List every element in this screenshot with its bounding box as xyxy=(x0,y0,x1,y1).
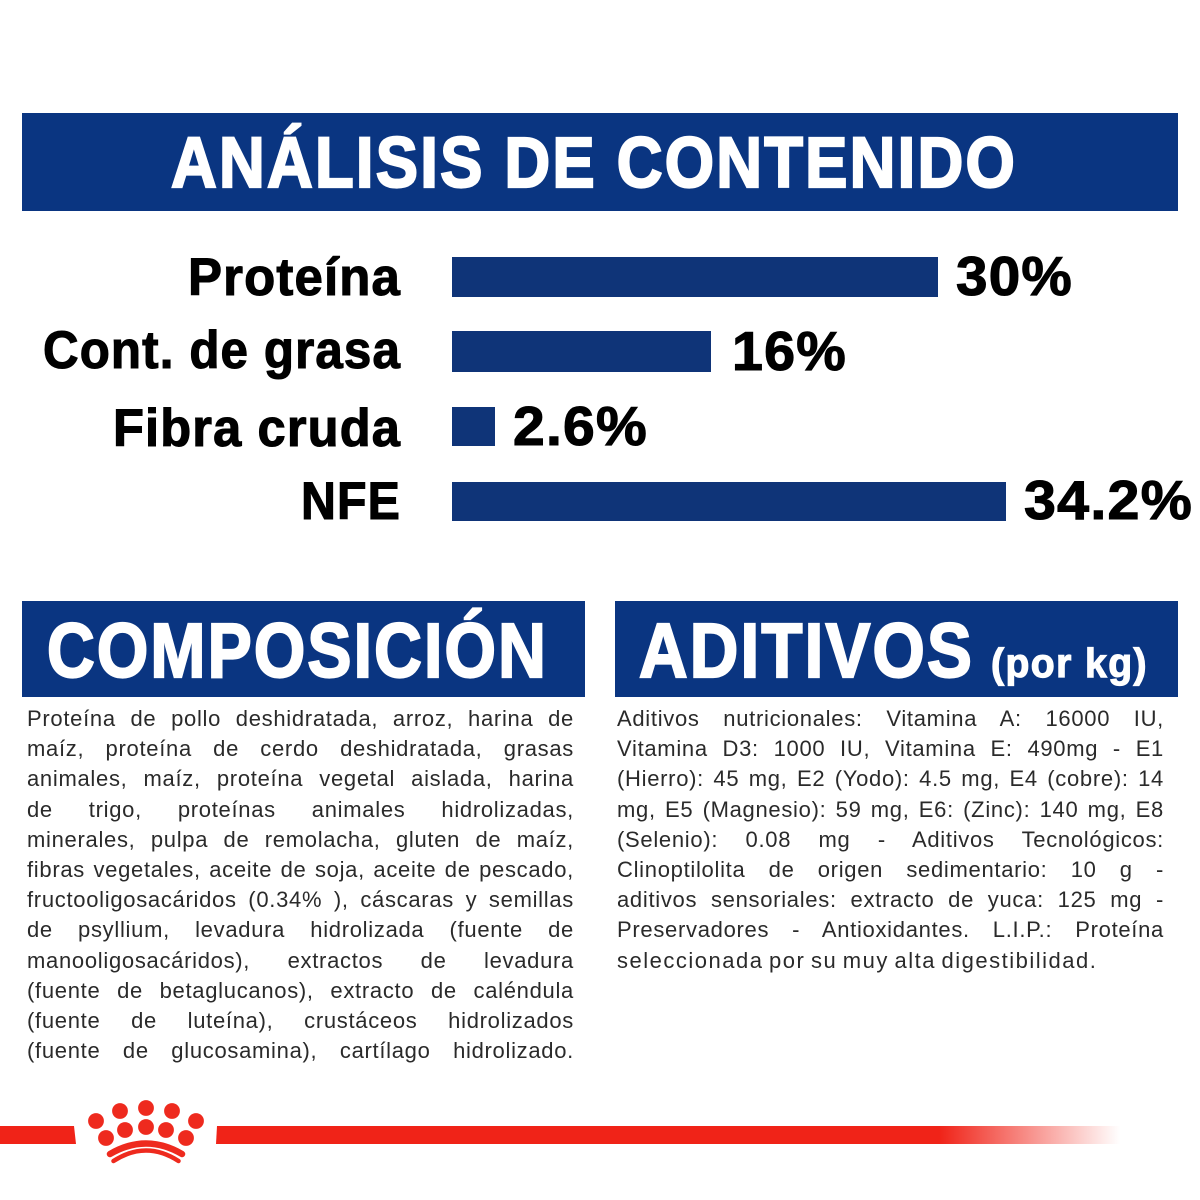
additives text block: aditivos sensoriales: extracto de yuca: 125 mg - xyxy=(617,887,1164,912)
row: Proteína xyxy=(188,245,1073,307)
additives text block: mg, E5 (Magnesio): 59 mg, E6: (Zinc): 140 mg, E8 xyxy=(617,797,1164,822)
row: Fibra cruda: 2.6% xyxy=(513,395,648,457)
red footer line right xyxy=(216,1126,1120,1144)
composition heading: COMPOSICIÓN xyxy=(47,608,548,694)
row: Cont. de grasa xyxy=(43,320,847,382)
composition text block: maíz, proteína de cerdo deshidratada, grasas xyxy=(27,736,574,761)
red footer line left xyxy=(0,1126,76,1144)
row: Proteína: Proteína xyxy=(188,248,401,307)
row: Cont. de grasa: Cont. de grasa xyxy=(43,321,401,380)
additives banner xyxy=(615,601,1178,697)
additives text block: (Hierro): 45 mg, E2 (Yodo): 4.5 mg, E4 (cobre): 14 xyxy=(617,766,1164,791)
row: NFE xyxy=(301,469,1193,531)
additives text block: Aditivos nutricionales: Vitamina A: 16000 IU, xyxy=(617,706,1164,731)
row: Fibra cruda: Fibra cruda xyxy=(113,399,401,458)
bar chart: nutrient analysis xyxy=(43,245,1193,531)
row: NFE: NFE xyxy=(301,472,401,531)
title: ANÁLISIS DE CONTENIDO xyxy=(171,124,1017,203)
row: Cont. de grasa: 16% xyxy=(732,320,847,382)
additives text block: Clinoptilolita de origen sedimentario: 10 g - xyxy=(617,857,1164,882)
composition banner xyxy=(22,601,585,697)
composition text block: manooligosacáridos), extractos de levadura xyxy=(27,948,574,972)
additives text block: (Selenio): 0.08 mg - Aditivos Tecnológicos: xyxy=(617,827,1164,852)
additives unit: (por kg) xyxy=(991,640,1148,686)
row: Proteína: 30% xyxy=(956,245,1073,307)
composition text block: fibras vegetales, aceite de soja, aceite de pescado, xyxy=(27,857,574,882)
composition text block: Proteína de pollo deshidratada, arroz, harina de xyxy=(27,706,574,731)
composition text block: (fuente de luteína), crustáceos hidrolizados xyxy=(27,1008,574,1033)
composition text block xyxy=(27,706,574,1063)
composition text block: minerales, pulpa de remolacha, gluten de maíz, xyxy=(27,827,574,852)
composition text block: (fuente de glucosamina), cartílago hidrolizado. xyxy=(27,1038,574,1063)
row: NFE: 34.2% xyxy=(1024,469,1193,531)
title banner xyxy=(22,113,1178,211)
composition text block: (fuente de betaglucanos), extracto de caléndula xyxy=(27,978,574,1003)
row: Fibra cruda xyxy=(113,395,648,458)
composition text block: animales, maíz, proteína vegetal aislada, harina xyxy=(27,766,574,791)
additives text block: Preservadores - Antioxidantes. L.I.P.: Proteína xyxy=(617,917,1164,942)
additives text block xyxy=(617,706,1164,972)
additives text block: seleccionada por su muy alta digestibilidad. xyxy=(617,948,1097,972)
icon: Royal Canin crown logo xyxy=(88,1100,204,1161)
additives heading: ADITIVOS xyxy=(639,608,974,694)
composition text block: fructooligosacáridos (0.34% ), cáscaras y semillas xyxy=(27,887,574,912)
composition text block: de trigo, proteínas animales hidrolizadas, xyxy=(27,797,574,822)
composition text block: de psyllium, levadura hidrolizada (fuente de xyxy=(27,917,574,942)
additives text block: Vitamina D3: 1000 IU, Vitamina E: 490mg - E1 xyxy=(617,736,1164,761)
